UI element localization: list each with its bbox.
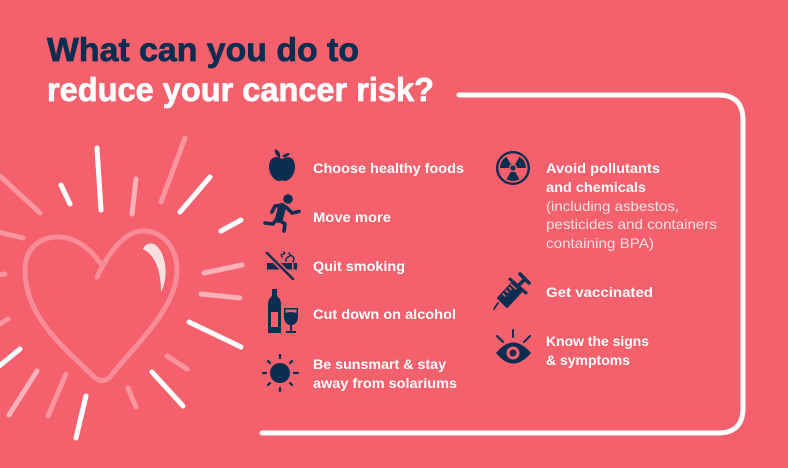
item: pollutants and chemicals: containing BPA) — [546, 235, 654, 251]
item: healthy foods: Choose healthy foods — [313, 160, 464, 176]
item: get vaccinated — [494, 274, 653, 309]
pink rays — [0, 138, 187, 416]
item: pollutants and chemicals: pesticides and containers — [546, 216, 717, 232]
heart illustration with rays — [0, 138, 242, 438]
item: pollutants and chemicals: (including asbestos, — [546, 198, 679, 214]
icon: bottle and wine glass — [268, 289, 298, 333]
icon: radiation symbol — [497, 152, 529, 184]
item: cut down on alcohol — [268, 289, 456, 333]
item: sunsmart: away from solariums — [313, 375, 457, 391]
item: move more — [265, 194, 391, 231]
item: sunsmart — [263, 355, 457, 391]
item: pollutants and chemicals: Avoid pollutants — [546, 160, 660, 176]
item: signs and symptoms — [496, 330, 649, 368]
item: pollutants and chemicals — [497, 152, 717, 251]
item: cut down on alcohol: Cut down on alcohol — [313, 306, 456, 322]
item: move more: Move more — [313, 209, 391, 225]
item: signs and symptoms: Know the signs — [546, 333, 649, 349]
title — [47, 31, 434, 108]
icon: crossed-out cigarette — [266, 252, 297, 280]
icon: heart highlight — [143, 244, 166, 292]
icon: running person — [265, 194, 299, 231]
icon: heart outline — [25, 231, 177, 380]
white rays — [0, 148, 241, 438]
icon: sun — [263, 355, 298, 391]
white rounded frame — [262, 95, 743, 433]
item: healthy foods — [269, 149, 464, 181]
item: get vaccinated: Get vaccinated — [546, 284, 653, 300]
icon: eye — [496, 330, 531, 364]
title: What can you do to — [47, 31, 359, 68]
item: sunsmart: Be sunsmart & stay — [313, 356, 446, 372]
item: signs and symptoms: & symptoms — [546, 352, 630, 368]
pale rays — [9, 179, 242, 415]
item: quit smoking — [266, 252, 405, 280]
title: reduce your cancer risk? — [47, 71, 434, 108]
item: quit smoking: Quit smoking — [313, 258, 405, 274]
icon: apple — [269, 149, 295, 181]
item: pollutants and chemicals: and chemicals — [546, 179, 646, 195]
icon: syringe — [494, 274, 529, 309]
